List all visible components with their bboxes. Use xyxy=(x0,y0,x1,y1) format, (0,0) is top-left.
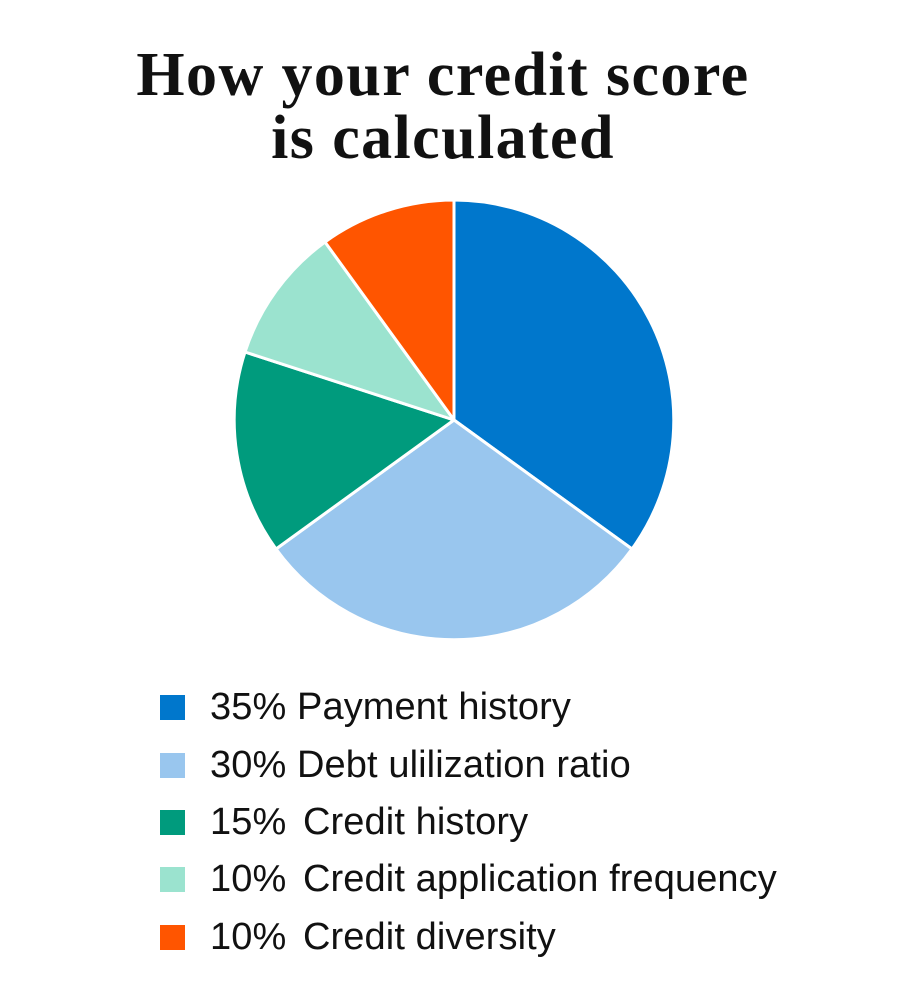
slice: debt utilization 30% xyxy=(276,420,632,640)
title: is calculated xyxy=(271,104,615,172)
slice: credit history 15% xyxy=(234,352,454,549)
legend item: application frequency: 10% Credit application frequency xyxy=(210,858,777,900)
title xyxy=(136,41,750,172)
legend item: credit history: 15% Credit history xyxy=(210,801,528,843)
slice: credit diversity 10% xyxy=(325,200,454,420)
slice: payment history 35% xyxy=(454,200,674,549)
legend item: debt utilization: 30% Debt ulilization ratio xyxy=(210,744,631,786)
slice: application frequency 10% xyxy=(245,242,454,420)
legend item: credit diversity: 10% Credit diversity xyxy=(210,916,556,958)
legend xyxy=(160,686,777,958)
legend item: payment history: 35% Payment history xyxy=(210,686,571,728)
title: How your credit score xyxy=(136,41,750,109)
